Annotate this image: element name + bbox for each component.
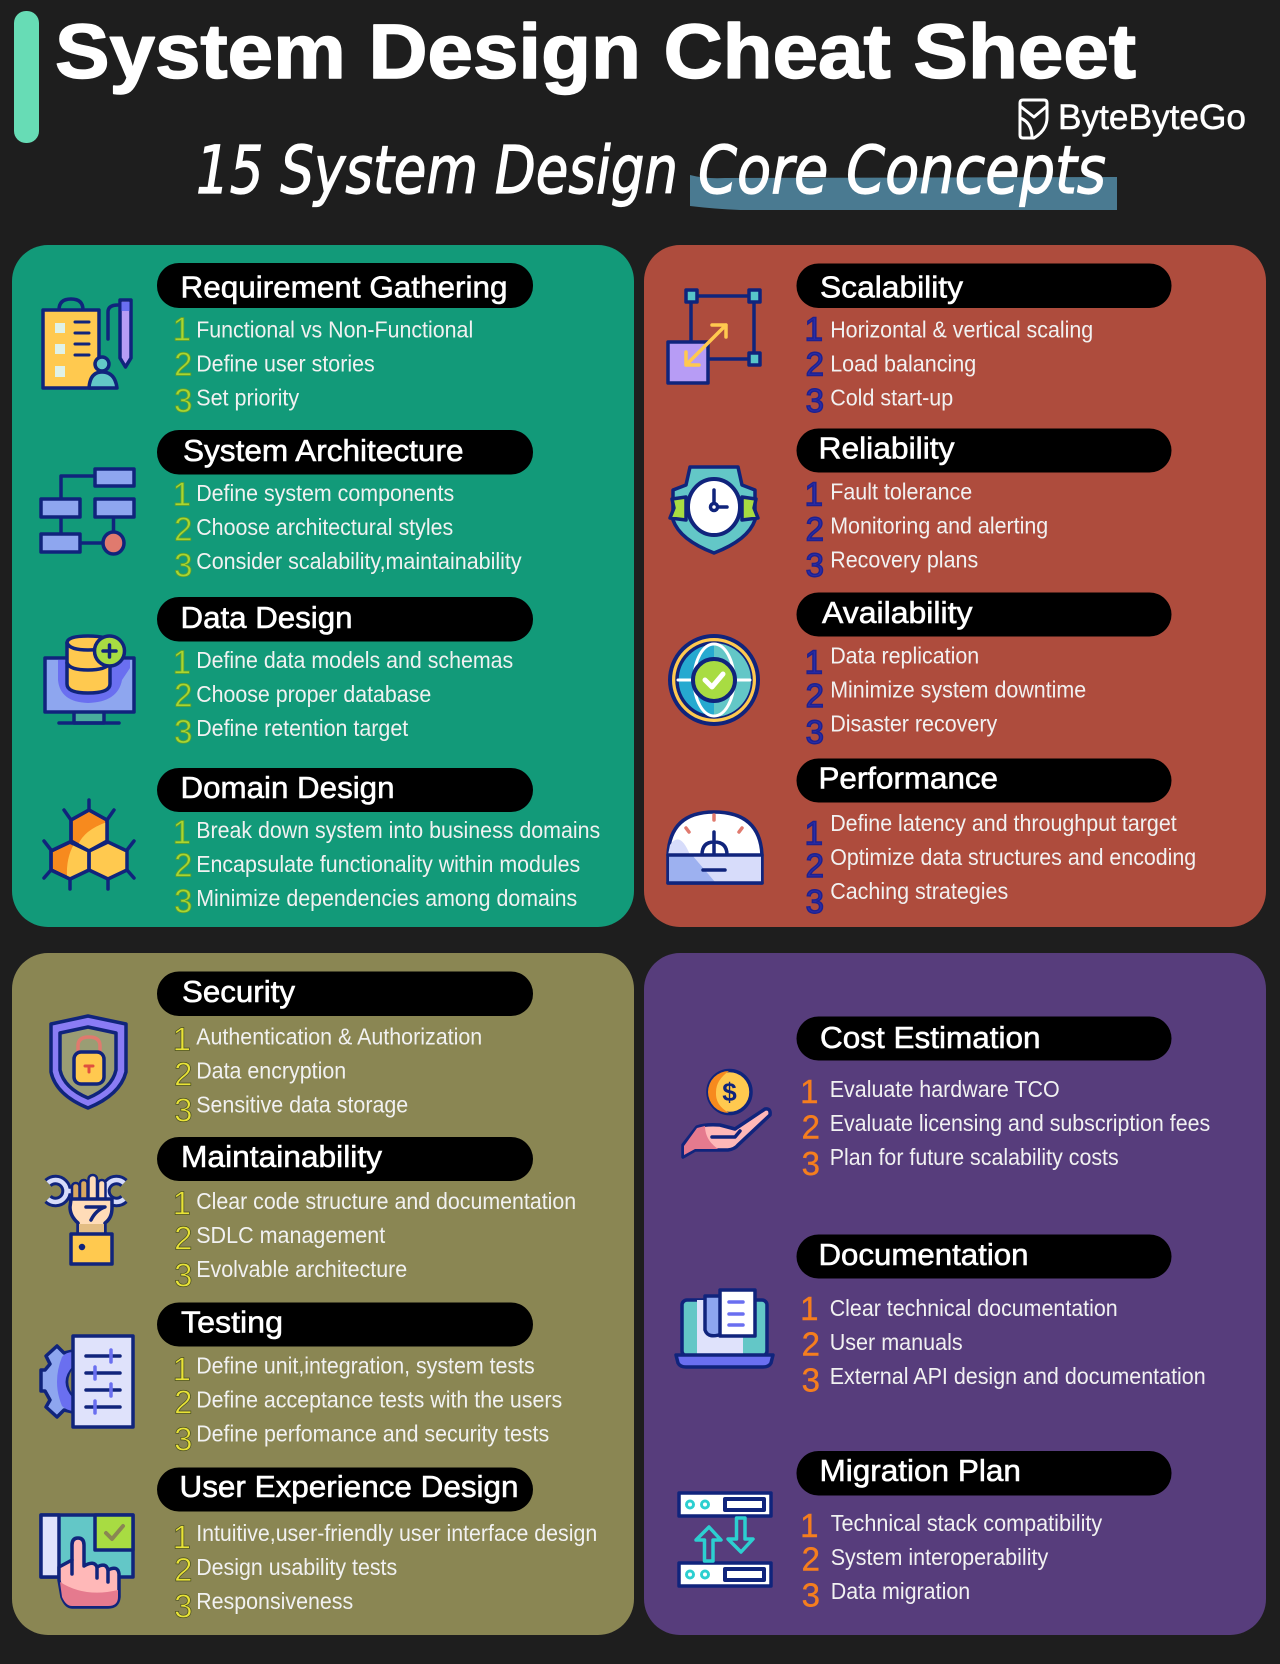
item 1: Clear technical documentation [830,1295,1118,1321]
item 3: Disaster recovery [830,710,998,736]
heading pill [796,428,1172,472]
section: Reliability [670,428,1172,584]
item 2: 2 [174,677,192,714]
item 3: Caching strategies [830,878,1008,904]
heading pill [157,597,533,642]
item 1: 1 [173,1519,191,1556]
item 2: System interoperability [831,1544,1049,1570]
item 3 [802,1144,1119,1182]
subtitle: Core Concepts [698,132,1106,209]
item 3: 3 [802,1145,820,1182]
item 1: 1 [173,1021,191,1058]
item 1 [800,1290,1118,1327]
item 3: 3 [806,714,824,751]
item 3 [174,1256,407,1294]
item 2 [802,1326,963,1363]
item 1: Clear code structure and documentation [196,1188,576,1214]
item 2: Monitoring and alerting [830,512,1048,538]
heading pill: Maintainability [181,1139,383,1174]
icon: servers with arrows [679,1493,771,1586]
item 1: Authentication & Authorization [196,1023,482,1049]
item 2: User manuals [830,1329,963,1355]
item 3: Responsiveness [196,1588,353,1614]
item 3 [174,1420,549,1458]
item 3 [174,1588,353,1625]
item 2: Encapsulate functionality within modules [196,851,580,877]
item 2: Define acceptance tests with the users [196,1386,562,1412]
item 2: SDLC management [196,1222,386,1248]
item 2 [806,511,1048,548]
item 2: Data encryption [196,1057,346,1083]
item 2: Define user stories [196,350,375,376]
item 1: Technical stack compatibility [831,1510,1103,1536]
section: Performance [668,758,1196,920]
item 3 [806,878,1008,920]
icon: architecture diagram [41,469,134,554]
heading pill: Cost Estimation [820,1020,1040,1055]
item 1: 1 [173,311,191,348]
item 1 [173,814,600,851]
item 1 [800,1507,1103,1544]
item 3: 3 [174,1588,192,1625]
item 1: Break down system into business domains [196,817,600,843]
item 1 [173,1021,482,1058]
item 2: 2 [174,1384,192,1421]
item 2: 2 [174,1551,192,1588]
section: Domain Design [44,768,600,920]
item 2: 2 [174,847,192,884]
title: System Design Cheat Sheet [55,9,1136,95]
item 1: Define data models and schemas [196,647,513,673]
item 3: Consider scalability,maintainability [196,548,522,574]
heading pill [796,592,1172,636]
item 3: Define retention target [196,715,409,741]
icon: scaling square [668,290,760,383]
heading pill: Performance [818,760,998,796]
item 1: 1 [173,644,191,681]
heading pill: User Experience Design [180,1469,518,1504]
item 2 [802,1109,1210,1146]
item 2 [806,676,1086,714]
item 1 [805,810,1177,852]
item 1: Horizontal & vertical scaling [830,316,1093,342]
item 2: 2 [802,1109,820,1146]
item 3: Sensitive data storage [196,1091,408,1117]
icon: globe check [670,636,758,724]
section: Maintainability [48,1137,576,1294]
item 3 [174,547,522,584]
item 1: 1 [173,1185,191,1222]
item 3 [806,382,953,419]
item 1: 1 [805,311,823,348]
item 1: Define latency and throughput target [830,810,1177,836]
heading pill: Domain Design [180,770,394,805]
item 2: 2 [174,1220,192,1257]
item 3: 3 [802,1577,820,1614]
item 1: 1 [173,1351,191,1388]
heading pill: Data Design [180,600,352,635]
item 2 [802,1541,1049,1578]
heading pill [157,972,533,1016]
item 2 [174,511,453,548]
section: System Architecture [41,430,533,584]
section: Cost Estimation [683,1016,1210,1182]
item 2 [174,677,431,714]
item 1: 1 [805,815,823,852]
item 3: 3 [802,1362,820,1399]
item 2: 2 [174,346,192,383]
heading pill [796,1451,1172,1496]
item 3: Recovery plans [830,546,978,572]
section: Documentation [676,1234,1206,1399]
item 3: Minimize dependencies among domains [196,885,577,911]
heading pill [157,263,533,308]
item 1: Define unit,integration, system tests [196,1352,535,1378]
item 1 [173,1519,597,1556]
item 2: Design usability tests [196,1554,397,1580]
item 1 [805,311,1093,348]
item 3: 3 [806,883,824,920]
item 3 [806,546,978,584]
section: Testing [41,1302,562,1458]
icon: gauge [668,812,762,883]
section: User Experience Design [41,1468,597,1625]
item 1: 1 [800,1290,818,1327]
item 3: 3 [806,382,824,419]
icon: coin in hand: $ [722,1077,737,1107]
item 1 [173,1185,576,1222]
item 3: Define perfomance and security tests [196,1420,549,1446]
item 3 [174,883,577,920]
item 3 [174,713,409,750]
heading pill [796,758,1172,802]
item 3: Cold start-up [830,384,953,410]
item 2 [174,1384,562,1421]
heading pill: System Architecture [183,433,464,468]
item 3: 3 [174,547,192,584]
heading pill [157,430,533,474]
item 3: External API design and documentation [830,1363,1206,1389]
item 3: 3 [174,1092,192,1129]
icon: coin in hand [683,1070,770,1157]
item 3: 3 [806,547,824,584]
panel: green [12,245,634,927]
section: Migration Plan [679,1451,1172,1614]
accent bar [14,11,39,143]
heading pill [157,1302,533,1346]
item 1: 1 [800,1507,818,1544]
subtitle: 15 System Design [196,132,678,209]
item 2: Minimize system downtime [830,676,1086,702]
item 2: Evaluate licensing and subscription fees [830,1110,1210,1136]
item 3: Plan for future scalability costs [830,1144,1119,1170]
item 2: 2 [174,511,192,548]
heading pill: Requirement Gathering [180,270,508,304]
item 3 [174,1091,408,1129]
heading pill [796,1234,1172,1278]
item 1: Intuitive,user-friendly user interface design [196,1520,597,1546]
item 2: 2 [802,1541,820,1578]
icon: gear and checklist [41,1336,133,1427]
item 3: Set priority [196,384,300,410]
item 2 [174,1551,397,1588]
heading pill [157,1137,533,1181]
icon: shield lock [51,1016,126,1108]
item 2 [806,844,1196,884]
item 1 [173,1351,535,1388]
item 3 [802,1577,970,1614]
heading pill [796,264,1172,308]
icon: hand with wrench [48,1175,124,1264]
item 1 [805,642,979,681]
item 1: 1 [805,644,823,681]
item 1: 1 [173,814,191,851]
item 3: 3 [174,713,192,750]
item 2: 2 [806,511,824,548]
heading pill: Migration Plan [820,1453,1021,1488]
item 3: 3 [174,883,192,920]
item 3: Data migration [831,1578,970,1604]
section: Requirement Gathering [43,263,533,419]
icon: hexagons [44,800,134,889]
section: Scalability [668,264,1172,419]
item 2 [174,1220,386,1257]
heading pill: Availability [822,595,973,630]
item 2: Optimize data structures and encoding [830,844,1196,870]
item 2: Choose architectural styles [196,514,453,540]
item 1: 1 [173,476,191,513]
item 3 [174,382,300,419]
panel: olive [12,953,634,1635]
item 1 [805,476,972,513]
item 1 [173,311,473,348]
item 2: 2 [806,847,824,884]
heading pill: Security [182,974,296,1009]
item 1: Data replication [830,642,979,668]
heading pill: Reliability [818,430,955,466]
item 3 [802,1362,1206,1399]
item 1: Define system components [196,480,454,506]
heading pill: Scalability [820,270,964,304]
item 2: 2 [806,677,824,714]
section: Data Design [45,597,533,750]
item 3: Evolvable architecture [196,1256,407,1282]
icon: shield clock [670,467,758,553]
item 2 [806,346,976,383]
item 2: Load balancing [830,350,976,376]
section: Availability [670,592,1172,751]
icon: clipboard with pen [43,299,131,388]
item 2: 2 [806,346,824,383]
item 2 [174,847,580,884]
subtitle highlight brush [690,175,1117,210]
item 1: 1 [805,476,823,513]
item 2: 2 [174,1056,192,1093]
section: Security [51,972,533,1129]
item 1: Fault tolerance [830,478,972,504]
item 1 [173,644,513,681]
panel: red [644,245,1266,927]
item 3: 3 [174,1257,192,1294]
item 3 [806,710,998,751]
item 3: 3 [174,1421,192,1458]
item 1 [800,1073,1060,1110]
item 1: 1 [800,1073,818,1110]
panel: purple [644,953,1266,1635]
icon: touch interface [41,1515,133,1607]
heading pill [796,1016,1172,1060]
icon: database on monitor [45,636,134,723]
item 2 [174,1056,346,1093]
icon: laptop with documents [676,1290,773,1367]
item 1 [173,476,454,513]
item 1: Evaluate hardware TCO [830,1076,1060,1102]
subtitle [196,132,1106,209]
heading pill: Testing [181,1304,283,1340]
logo: ByteByteGo: ByteByteGo [1058,98,1246,137]
item 1: Functional vs Non-Functional [196,316,473,342]
heading pill [157,768,533,812]
heading pill: Documentation [818,1237,1028,1272]
item 2: Choose proper database [196,681,431,707]
item 2: 2 [802,1326,820,1363]
item 3: 3 [174,382,192,419]
item 2 [174,346,375,383]
